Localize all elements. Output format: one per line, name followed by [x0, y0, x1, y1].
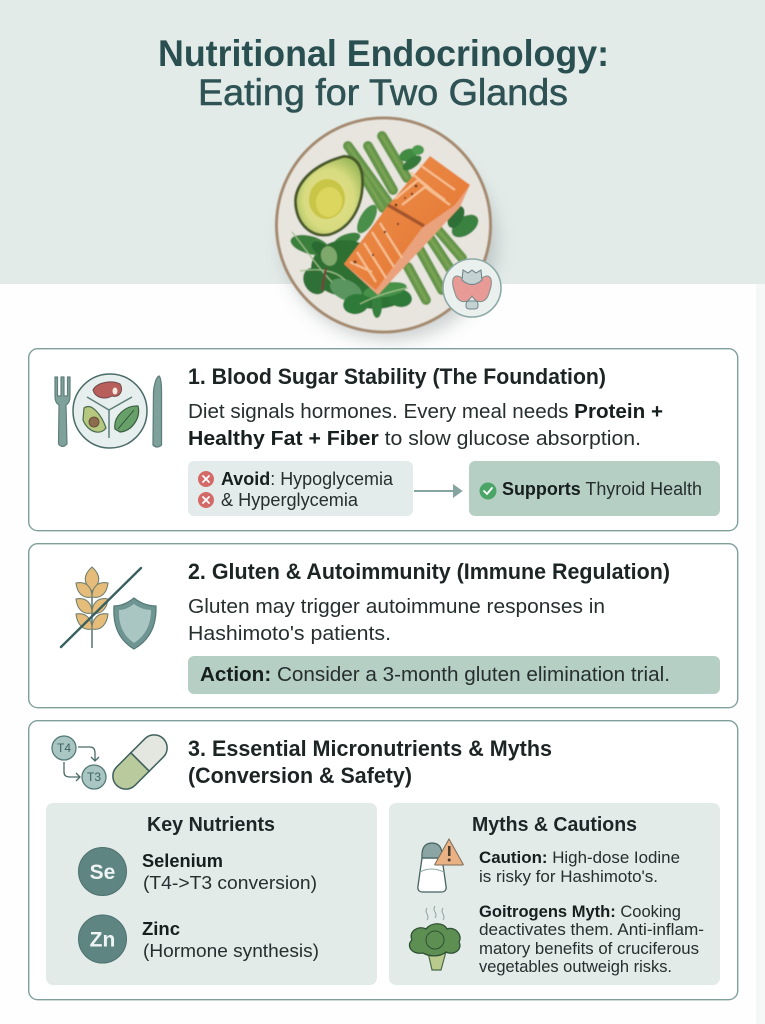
- goitrogens text: deactivates them. Anti-inflam-: [479, 920, 704, 939]
- heading: 3. Essential Micronutrients & Myths: [188, 736, 552, 761]
- thyroid badge: [443, 259, 501, 317]
- goitrogens text: matory benefits of cruciferous: [479, 939, 699, 958]
- zinc: [78, 915, 319, 963]
- icon: capsule: [107, 729, 173, 795]
- body text: [188, 401, 663, 450]
- icon: T4 to T3 conversion: T4: [57, 741, 71, 755]
- zinc: Zinc: [142, 919, 180, 939]
- heading: 1. Blood Sugar Stability (The Foundation): [188, 364, 606, 389]
- plate photo: salmon, avocado, asparagus, greens: [275, 116, 501, 340]
- arrow: [414, 486, 461, 496]
- sub heading: Key Nutrients: [147, 814, 275, 836]
- sub heading: Myths & Cautions: [472, 814, 637, 836]
- header band: [0, 0, 765, 284]
- caution text: is risky for Hashimoto's.: [479, 867, 658, 886]
- icon: T4 to T3 conversion: T3: [87, 770, 101, 784]
- title: Eating for Two Glands: [198, 72, 568, 113]
- salmon: [344, 156, 470, 295]
- panel: key nutrients: [46, 803, 377, 985]
- callout: avoid: [188, 461, 413, 516]
- callout: action: [188, 656, 720, 694]
- body text: Gluten may trigger autoimmune responses in: [188, 596, 605, 618]
- avocado: [294, 155, 364, 237]
- panel: myths and cautions: [389, 803, 720, 985]
- greens: [288, 145, 482, 318]
- goitrogens text: [479, 902, 704, 976]
- body text: Healthy Fat + Fiber to slow glucose absorption.: [188, 428, 641, 450]
- callout: supports thyroid health: [469, 461, 720, 516]
- zinc: Zn: [90, 928, 115, 952]
- callout: avoid: & Hyperglycemia: [221, 490, 359, 510]
- title: [158, 33, 609, 113]
- body text: [188, 596, 605, 645]
- caution text: [479, 848, 680, 886]
- heading: 2. Gluten & Autoimmunity (Immune Regulation): [188, 559, 670, 584]
- callout: supports thyroid health: Supports Thyroid Health: [502, 479, 702, 499]
- panel: micronutrients and myths: [29, 721, 738, 1000]
- panel: blood sugar stability: [29, 349, 738, 531]
- icon: steaming broccoli: [409, 906, 460, 970]
- goitrogens text: Goitrogens Myth: Cooking: [479, 902, 681, 921]
- callout: action: Action: Consider a 3-month gluten elimination trial.: [200, 664, 670, 686]
- icon: T4 to T3 conversion: [52, 736, 106, 789]
- icon: salt shaker with warning: [418, 839, 463, 892]
- selenium: (T4->T3 conversion): [143, 873, 317, 893]
- caution text: Caution: High-dose Iodine: [479, 848, 680, 867]
- body text: Diet signals hormones. Every meal needs Protein +: [188, 401, 663, 423]
- selenium: Se: [90, 861, 115, 884]
- heading: [188, 736, 552, 788]
- panel: gluten and autoimmunity: [29, 544, 738, 708]
- heading: (Conversion & Safety): [188, 763, 412, 788]
- asparagus: [348, 136, 462, 300]
- selenium: Selenium: [142, 851, 223, 871]
- zinc: (Hormone synthesis): [143, 941, 319, 961]
- title: Nutritional Endocrinology:: [158, 33, 609, 74]
- selenium: [78, 848, 317, 896]
- goitrogens text: vegetables outweigh risks.: [479, 957, 672, 976]
- icon: wheat crossed out and shield: [61, 567, 156, 649]
- icon: fork, plate, knife: [55, 374, 162, 448]
- callout: avoid: Avoid: Hypoglycemia: [221, 469, 394, 489]
- body text: Hashimoto's patients.: [188, 623, 391, 645]
